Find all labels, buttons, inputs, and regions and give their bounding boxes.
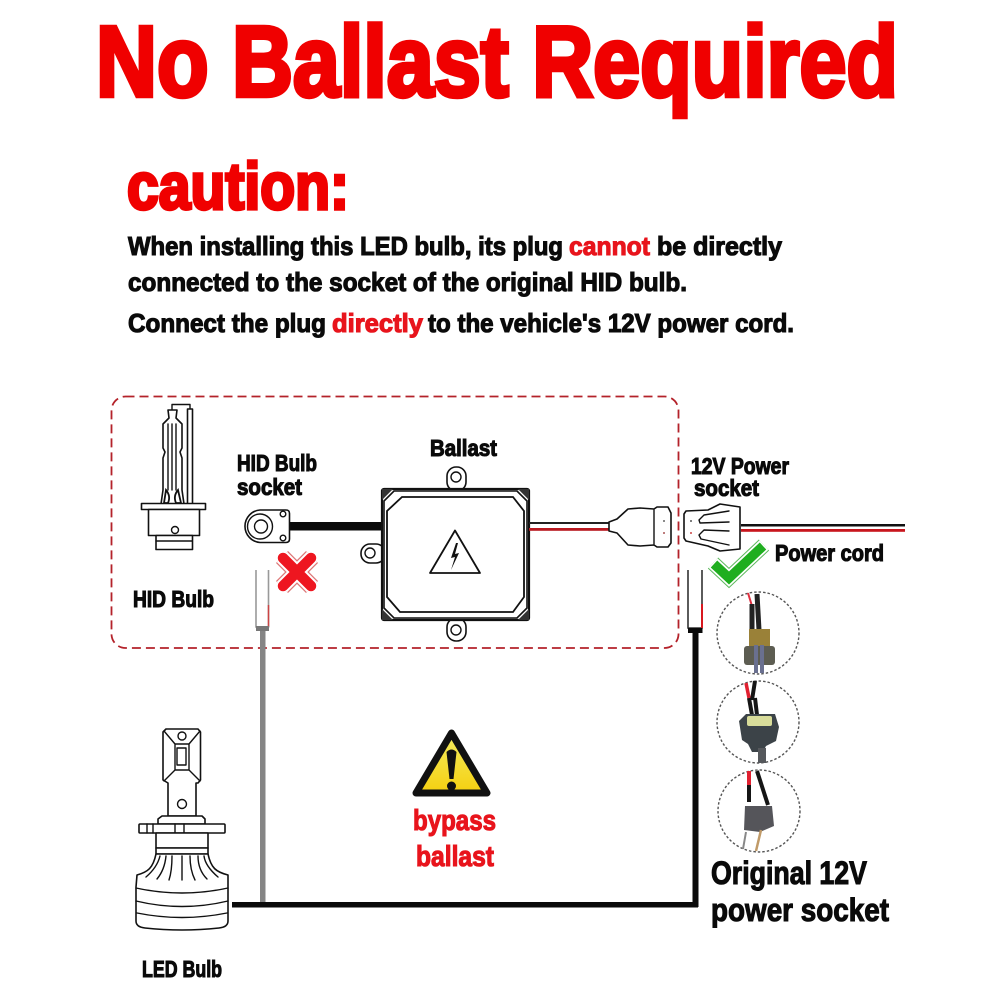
caution text block: to the vehicle's 12V power cord. [428,308,794,338]
icon: HID bulb socket [245,510,382,542]
label: Original 12V power socket: Original 12V [711,855,868,891]
icon: green check [713,545,764,578]
label: 12V Power socket [691,453,789,501]
label: Ballast: Ballast [430,435,497,461]
black 12V wire with prongs [688,570,702,907]
label: Original 12V power socket [711,855,889,928]
label: bypass ballast: bypass [413,805,496,837]
icon: connector photo 2 [717,681,799,763]
caution text block [128,231,794,338]
icon: connector photo 1 [717,592,799,674]
icon: red cross [282,557,312,587]
caution text block: cannot [569,231,650,261]
caution heading: caution: [127,149,349,223]
label: HID Bulb socket [237,450,317,500]
label: Original 12V power socket: power socket [711,892,889,928]
icon: connector photo 3 [718,770,800,852]
label: HID Bulb: HID Bulb [133,586,214,612]
caution text block: connected to the socket of the original HID bulb. [128,267,687,297]
label: Power cord: Power cord [775,540,884,566]
label: bypass ballast: ballast [416,841,494,873]
icon: HID bulb [142,404,206,550]
label: HID Bulb socket: HID Bulb [237,450,317,476]
caution text block: be directly [657,231,783,261]
label: bypass ballast [413,805,496,873]
ballast output wire [529,522,609,531]
label: HID Bulb socket: socket [237,474,302,500]
label: LED Bulb: LED Bulb [142,956,222,982]
grey LED wire with prongs [256,570,269,905]
icon: LED bulb [136,729,228,930]
icon: 12V power socket [684,504,740,551]
caution text block: When installing this LED bulb, its plug [128,231,563,261]
icon: ballast box [361,467,529,641]
icon: warning triangle [416,733,487,793]
caution text block: Connect the plug [128,308,326,338]
power cord wires [741,524,905,532]
caution text block: directly [332,308,424,338]
main bottom wire [232,902,698,908]
panel: dashed ballast region [112,396,678,648]
icon: ballast plug [609,507,671,547]
label: 12V Power socket: 12V Power [691,453,789,479]
label: 12V Power socket: socket [694,475,759,501]
